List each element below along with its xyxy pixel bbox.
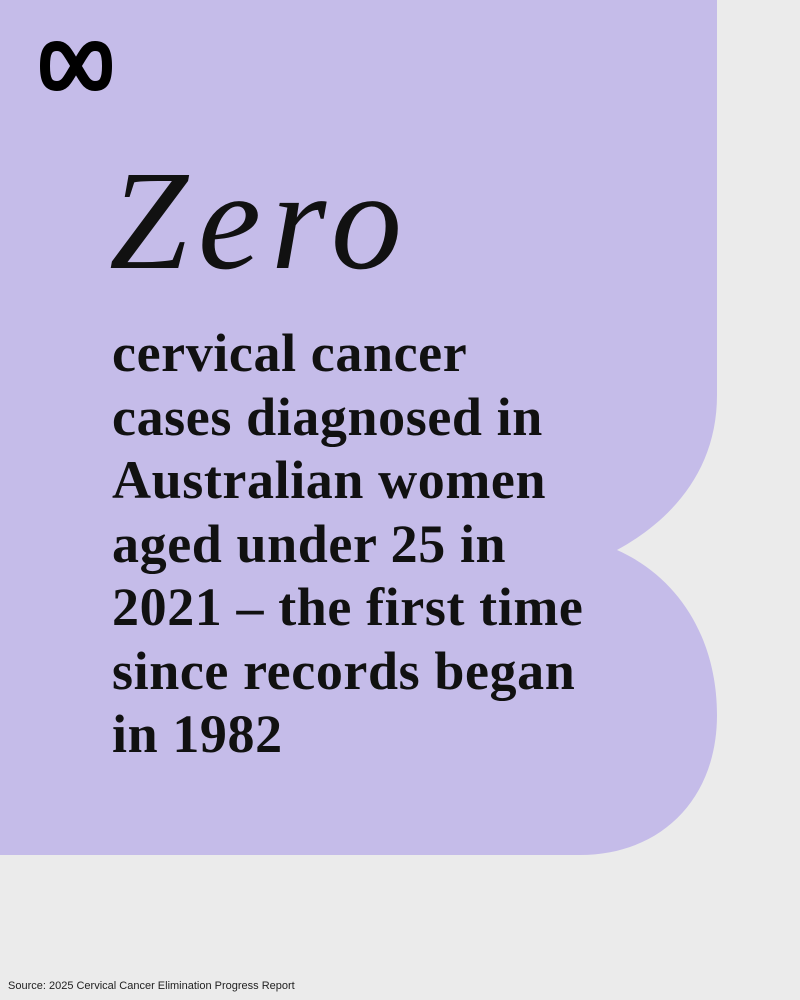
body text: 2021 – the first time xyxy=(112,577,583,637)
body text: since records began xyxy=(112,640,575,700)
icon: ABC logo xyxy=(40,41,112,91)
source: Source: 2025 Cervical Cancer Elimination Progress Report xyxy=(8,980,295,992)
body text: in 1982 xyxy=(112,704,283,764)
body text xyxy=(112,323,583,764)
body text: aged under 25 in xyxy=(112,514,506,574)
heading: Zero: Zero xyxy=(109,141,412,299)
body text: cases diagnosed in xyxy=(112,386,543,446)
body text: cervical cancer xyxy=(112,323,467,383)
body text: Australian women xyxy=(112,450,546,510)
